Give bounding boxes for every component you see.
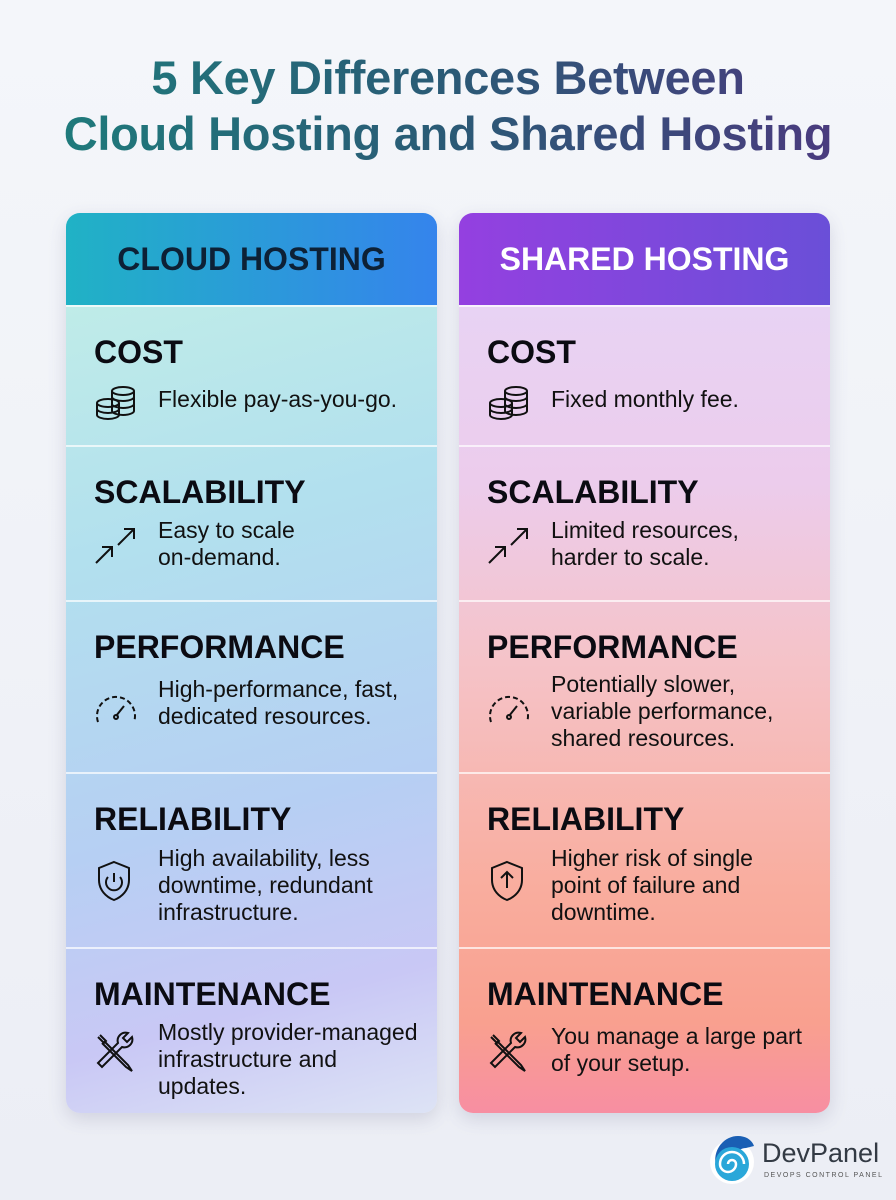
row: reliability <box>459 772 830 947</box>
logo: DevPanel: DevPanel <box>762 1138 879 1168</box>
title: Cloud Hosting and Shared Hosting <box>64 107 832 160</box>
icon: coins <box>489 386 528 420</box>
row: maintenance: MAINTENANCE <box>94 976 330 1012</box>
row: maintenance: updates. <box>158 1073 246 1099</box>
header: shared hosting: SHARED HOSTING <box>500 240 789 276</box>
row: maintenance <box>459 947 830 1113</box>
header: shared hosting <box>459 213 830 305</box>
row: reliability: Higher risk of single <box>551 845 753 871</box>
header: cloud hosting: CLOUD HOSTING <box>117 240 386 276</box>
row: scalability <box>459 445 830 600</box>
row: reliability: RELIABILITY <box>487 801 684 837</box>
row: reliability: downtime, redundant <box>158 872 373 898</box>
row: scalability: Easy to scale <box>158 517 295 543</box>
row: scalability: Limited resources, <box>551 517 739 543</box>
row: performance: High-performance, fast, <box>158 676 398 702</box>
row: maintenance <box>66 947 437 1113</box>
row: cost <box>459 305 830 445</box>
row: maintenance: of your setup. <box>551 1050 690 1076</box>
panel: cloud hosting <box>66 213 437 1113</box>
row: performance: shared resources. <box>551 725 735 751</box>
icon: gauge <box>96 696 136 722</box>
row: cost: COST <box>94 334 183 370</box>
row: scalability <box>66 445 437 600</box>
row: scalability: SCALABILITY <box>487 474 699 510</box>
row: reliability: High availability, less <box>158 845 370 871</box>
row: maintenance: You manage a large part <box>551 1023 802 1049</box>
row: reliability: RELIABILITY <box>94 801 291 837</box>
row: performance: Potentially slower, <box>551 671 735 697</box>
row: cost: Flexible pay-as-you-go. <box>158 386 397 412</box>
row: cost: COST <box>487 334 576 370</box>
icon: tools <box>490 1032 526 1072</box>
icon: tools <box>96 1032 134 1072</box>
icon: shield power <box>98 860 130 902</box>
icon: shield arrow <box>491 860 523 902</box>
row: cost: Fixed monthly fee. <box>551 386 739 412</box>
row: cost <box>66 305 437 445</box>
row: performance <box>459 600 830 772</box>
title: 5 Key Differences Between <box>151 51 745 104</box>
logo: DevPanel <box>710 1136 883 1184</box>
row: reliability: point of failure and <box>551 872 740 898</box>
row: reliability <box>66 772 437 947</box>
row: performance: PERFORMANCE <box>487 629 738 665</box>
row: performance: PERFORMANCE <box>94 629 345 665</box>
panel: shared hosting <box>459 213 830 1113</box>
icon: coins <box>96 386 135 420</box>
row: performance: variable performance, <box>551 698 773 724</box>
row: maintenance: MAINTENANCE <box>487 976 723 1012</box>
icon: arrows <box>488 528 528 564</box>
row: reliability: downtime. <box>551 899 656 925</box>
logo: DevPanel: DEVOPS CONTROL PANEL <box>764 1172 883 1179</box>
header: cloud hosting <box>66 213 437 305</box>
row: performance: dedicated resources. <box>158 703 372 729</box>
row: maintenance: Mostly provider-managed <box>158 1019 418 1045</box>
row: scalability: on-demand. <box>158 544 281 570</box>
row: scalability: harder to scale. <box>551 544 710 570</box>
row: performance <box>66 600 437 772</box>
title <box>0 50 896 162</box>
row: scalability: SCALABILITY <box>94 474 306 510</box>
icon: gauge <box>489 696 529 722</box>
row: maintenance: infrastructure and <box>158 1046 337 1072</box>
icon: arrows <box>95 528 135 564</box>
row: reliability: infrastructure. <box>158 899 299 925</box>
